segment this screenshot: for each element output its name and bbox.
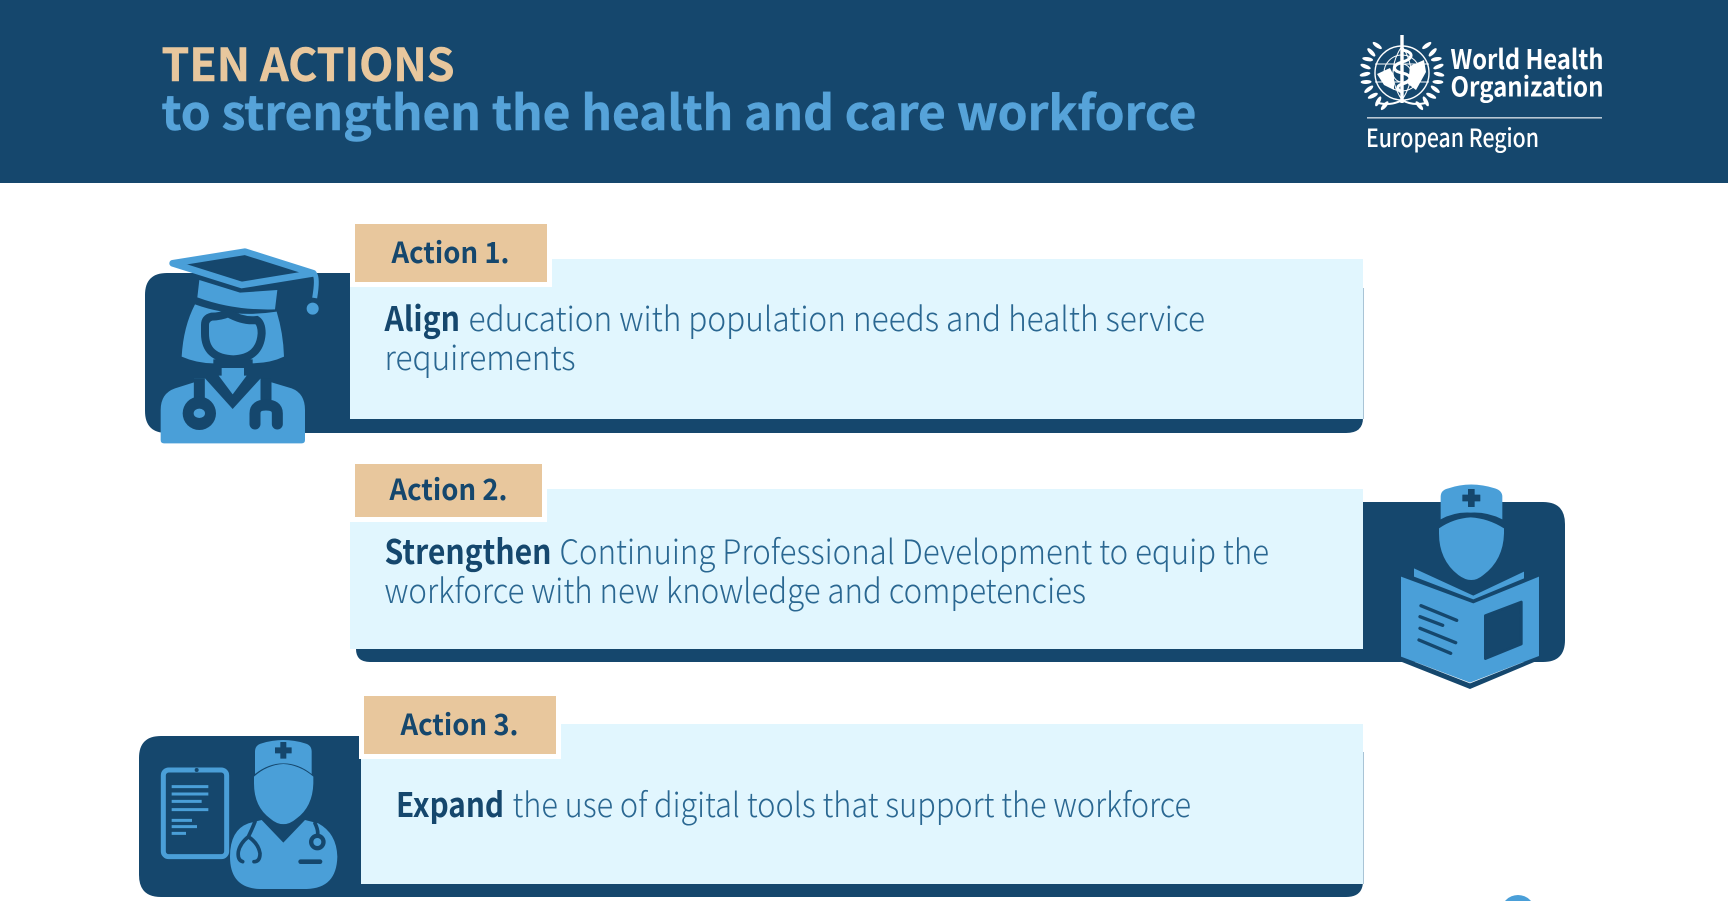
action 2 text: Strengthen — [384, 525, 552, 574]
action 1 text: requirements — [384, 331, 576, 380]
next panel icon top (cropped) — [1501, 895, 1535, 901]
action 1 text — [384, 292, 1205, 380]
logo wordmark — [1366, 38, 1604, 155]
action 3 label: Action 3. — [400, 702, 518, 744]
panel: action 1 — [145, 224, 1364, 443]
title — [162, 29, 1196, 144]
icon: graduate health worker — [161, 252, 319, 443]
action 2 text: Continuing Professional Development to equip the — [560, 525, 1269, 574]
action 1 label: Action 1. — [391, 230, 510, 272]
icon: nurse reading book — [1401, 484, 1539, 689]
logo wordmark: Organization — [1450, 66, 1604, 104]
action 3 text: Expand — [396, 778, 504, 827]
header banner — [0, 0, 1728, 183]
action 2 label: Action 2. — [389, 467, 508, 509]
title: to strengthen the health and care workforce — [162, 75, 1196, 144]
logo wordmark: World Health — [1450, 38, 1604, 77]
WHO logo — [1359, 35, 1604, 155]
action 3 text: the use of digital tools that support the workforce — [512, 778, 1191, 827]
action 2 text: workforce with new knowledge and competencies — [384, 564, 1086, 613]
panel: action 3 — [139, 696, 1364, 897]
action 1 text: Align — [384, 292, 460, 341]
icon: doctor with tablet — [163, 740, 337, 889]
icon: WHO emblem — [1359, 35, 1445, 111]
panel: action 2 — [350, 464, 1565, 689]
logo wordmark: European Region — [1366, 119, 1539, 155]
action 1 text: education with population needs and health service — [468, 292, 1205, 341]
action 2 text — [384, 525, 1269, 613]
title: TEN ACTIONS — [162, 29, 454, 94]
